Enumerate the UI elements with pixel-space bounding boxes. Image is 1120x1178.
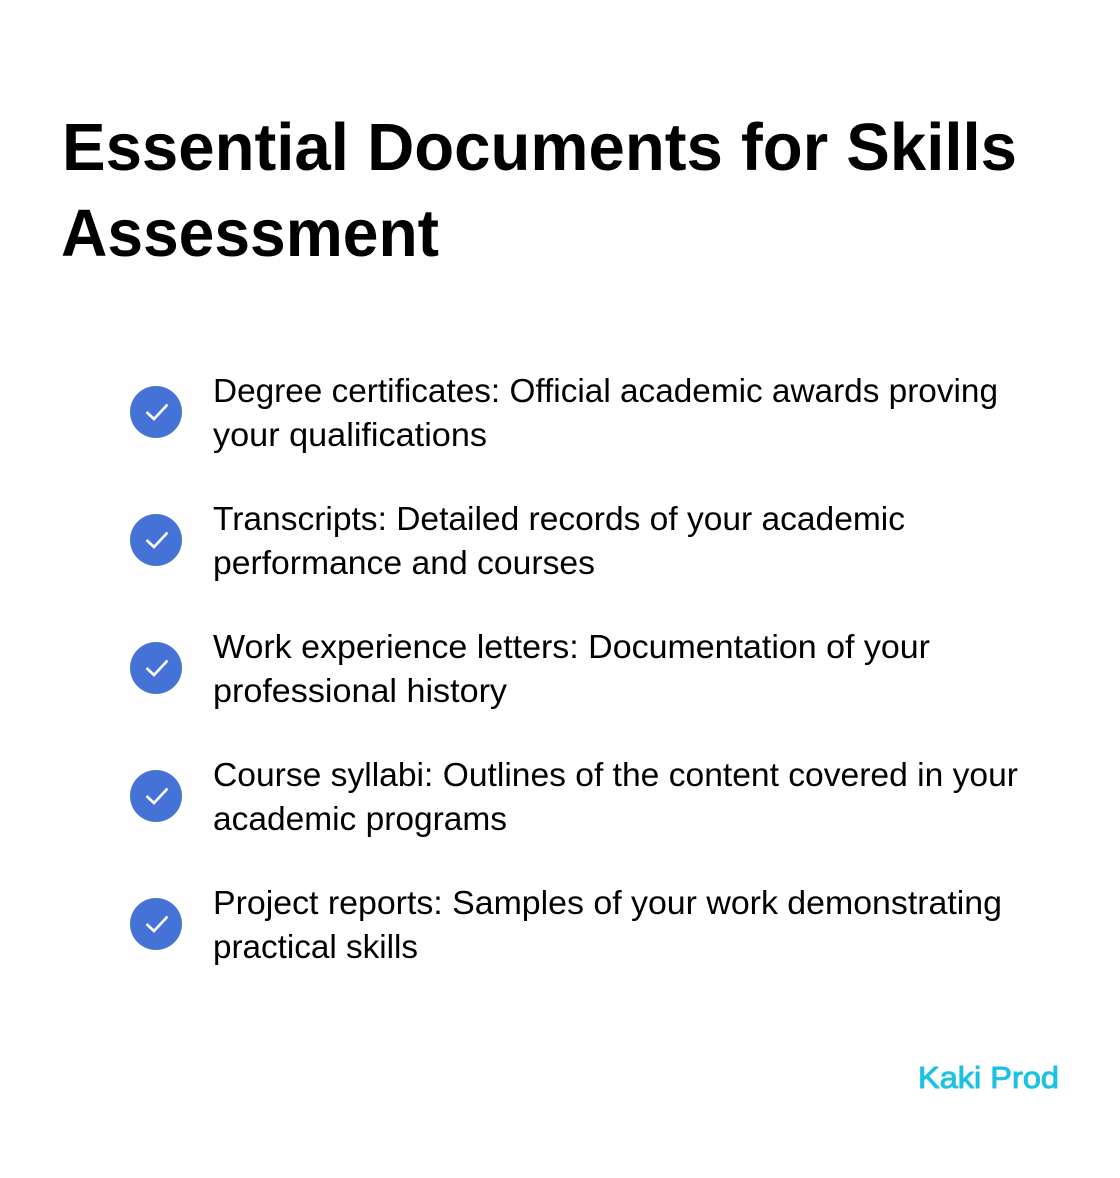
- text: transcripts: [213, 500, 905, 581]
- item: transcripts: [130, 500, 905, 581]
- item: course syllabi: [130, 756, 1018, 837]
- text: course syllabi: [213, 756, 1018, 837]
- text: transcripts: Transcripts: Detailed records of your academic: [213, 500, 905, 537]
- text: degree certificates: [213, 372, 998, 453]
- text: work experience letters: [213, 628, 930, 709]
- title: Assessment: [61, 196, 439, 271]
- text: project reports: practical skills: [213, 928, 418, 965]
- item: work experience letters: [130, 628, 930, 709]
- title: [61, 110, 1017, 271]
- logo: Kaki Prod: Kaki Prod: [918, 1060, 1059, 1095]
- icon: check circle: [130, 386, 182, 438]
- text: work experience letters: Work experience letters: Documentation of your: [213, 628, 930, 665]
- item: degree certificates: [130, 372, 998, 453]
- text: project reports: [213, 884, 1002, 965]
- title: Essential Documents for Skills: [62, 110, 1017, 185]
- icon: check circle: [130, 770, 182, 822]
- text: work experience letters: professional history: [213, 672, 508, 709]
- text: transcripts: performance and courses: [213, 544, 595, 581]
- text: degree certificates: your qualifications: [213, 416, 487, 453]
- icon: check circle: [130, 514, 182, 566]
- text: course syllabi: academic programs: [213, 800, 507, 837]
- text: degree certificates: Degree certificates: Official academic awards proving: [213, 372, 998, 409]
- text: course syllabi: Course syllabi: Outlines of the content covered in your: [213, 756, 1018, 793]
- icon: check circle: [130, 898, 182, 950]
- text: project reports: Project reports: Samples of your work demonstrating: [213, 884, 1002, 921]
- icon: check circle: [130, 642, 182, 694]
- checklist: [130, 372, 1018, 965]
- item: project reports: [130, 884, 1002, 965]
